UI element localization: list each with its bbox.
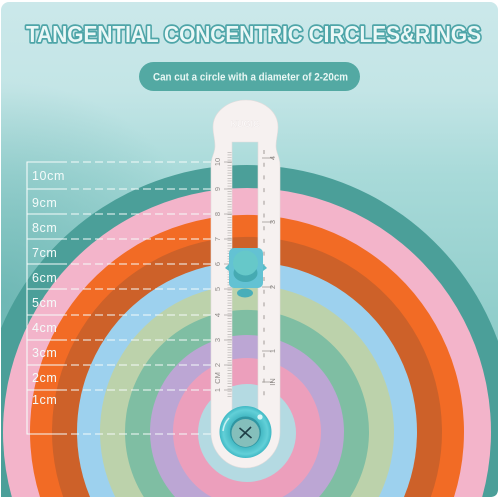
scale labels: 10cm: [32, 169, 65, 183]
metric numbers: 10: [213, 158, 222, 166]
scale labels: 9cm: [32, 196, 57, 210]
metric numbers: 1: [213, 388, 222, 392]
scale labels: 6cm: [32, 271, 57, 285]
sliding blade holder: [225, 248, 267, 298]
concentric coloured rings: [1, 165, 498, 497]
metric numbers: 5: [213, 287, 222, 291]
diameter scale bracket: [27, 162, 222, 434]
scale labels: 2cm: [32, 371, 57, 385]
scale labels: 5cm: [32, 296, 57, 310]
scale labels: 8cm: [32, 221, 57, 235]
metric numbers: 7: [213, 237, 222, 241]
metric numbers: CM: [213, 372, 222, 384]
inch numbers: 2: [268, 285, 277, 289]
scale labels: 7cm: [32, 246, 57, 260]
metric numbers: [213, 158, 222, 392]
metric numbers: 4: [213, 313, 222, 317]
logo emboss: KUGIC: [230, 119, 260, 129]
metric numbers: 9: [213, 187, 222, 191]
metric numbers: 6: [213, 262, 222, 266]
inch numbers: 3: [268, 220, 277, 224]
scale labels: 4cm: [32, 321, 57, 335]
compass ruler body: [211, 100, 280, 468]
scale labels: 1cm: [32, 393, 57, 407]
inch numbers: 1: [268, 349, 277, 353]
subtitle pill: [139, 62, 360, 91]
scale labels: 3cm: [32, 346, 57, 360]
pivot button: [220, 406, 272, 458]
inch numbers: [268, 156, 277, 386]
metric numbers: 8: [213, 212, 222, 216]
inch ticks: [263, 150, 265, 398]
scale labels: [32, 169, 65, 407]
subtitle pill: Can cut a circle with a diameter of 2-20cm: [153, 72, 348, 84]
inch numbers: 4: [268, 156, 277, 160]
metric numbers: 3: [213, 338, 222, 342]
metric fine ticks: [228, 152, 232, 398]
metric numbers: 2: [213, 363, 222, 367]
inch numbers: IN: [268, 378, 277, 386]
